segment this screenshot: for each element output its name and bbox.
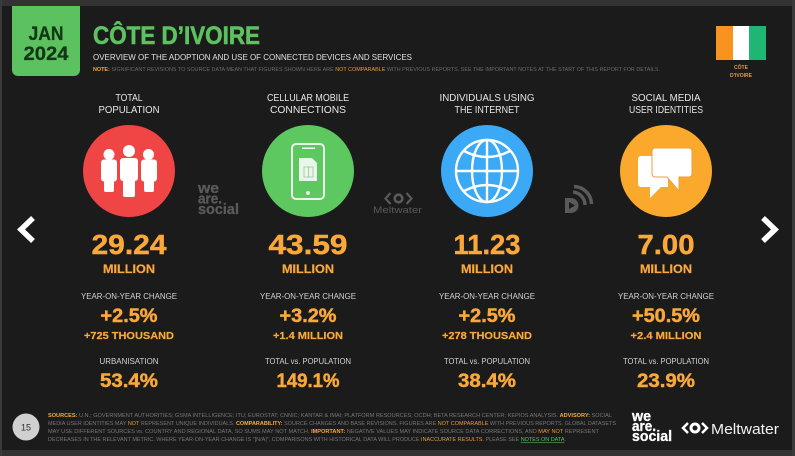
panel: individuals using the internet: YEAR-ON-YEAR CHANGE	[439, 292, 535, 301]
flag: Côte d'Ivoire: CÔTE	[734, 63, 749, 71]
footer notes: MAY USE DIFFERENT SOURCES vs. COUNTRY AND REGIONAL DATA, SO SUMS MAY NOT MATCH. IMPORTANT: NEGATIVE VALUES MAY INDICATE SOURCE DATA CORRECTIONS, AND MAY NOT REPRESENT	[48, 429, 600, 435]
panel: individuals using the internet: +278 THOUSAND	[442, 330, 532, 342]
panel: individuals using the internet: 11.23	[454, 229, 520, 260]
watermark: we are social: social	[198, 202, 239, 218]
footer notes: MEDIA USER IDENTITIES MAY NOT REPRESENT UNIQUE INDIVIDUALS. COMPARABILITY: SOURCE CHANGES AND BASE REVISIONS. FIGURES ARE NOT COMPARABLE WITH PREVIOUS REPORTS. GLOBAL DATASETS	[48, 421, 616, 427]
date badge: 2024	[24, 44, 69, 65]
logo: Meltwater	[683, 421, 779, 438]
panel: cellular mobile connections: +1.4 MILLION	[273, 330, 343, 342]
panel: individuals using the internet: MILLION	[461, 264, 513, 276]
panel: individuals using the internet: 38.4%	[458, 371, 516, 392]
title: CÔTE D’IVOIRE	[93, 20, 260, 50]
watermark: we are social: are.	[198, 192, 222, 208]
panel: individuals using the internet: THE INTERNET	[454, 104, 520, 116]
subtitle: OVERVIEW OF THE ADOPTION AND USE OF CONNECTED DEVICES AND SERVICES	[93, 52, 412, 62]
footer notes: SOURCES: U.N.; GOVERNMENT AUTHORITIES; GSMA INTELLIGENCE; ITU; EUROSTAT; CNNIC; KANTAR & IMAI; PLATFORM RESOURCES; OCDH; BETA RESEARCH CENTER; KEPIOS ANALYSIS. ADVISORY: SOCIAL	[48, 413, 612, 419]
panel: cellular mobile connections: YEAR-ON-YEAR CHANGE	[260, 292, 356, 301]
footer notes	[48, 413, 616, 443]
panel: cellular mobile connections: +3.2%	[280, 306, 337, 327]
logo: we are social	[631, 409, 672, 445]
icon: globe	[441, 125, 533, 217]
date badge	[12, 6, 80, 76]
panel: total population: 53.4%	[100, 371, 158, 392]
panel: total population: MILLION	[103, 264, 155, 276]
panel: cellular mobile connections: CONNECTIONS	[270, 104, 346, 116]
panel: individuals using the internet	[439, 92, 535, 392]
icon: mobile phone	[262, 125, 354, 217]
panel: cellular mobile connections: CELLULAR MOBILE	[267, 92, 349, 104]
panel: cellular mobile connections	[260, 92, 356, 392]
panel: social media user identities: 7.00	[638, 229, 694, 260]
icon: people	[83, 125, 175, 217]
page number: 15	[21, 422, 31, 432]
panel: social media user identities: MILLION	[640, 264, 692, 276]
panel: social media user identities	[618, 92, 714, 392]
panel: individuals using the internet: +2.5%	[458, 306, 516, 327]
logo: we are social: we	[631, 409, 651, 425]
panel: total population	[81, 92, 177, 392]
note: NOTE: SIGNIFICANT REVISIONS TO SOURCE DATA MEAN THAT FIGURES SHOWN HERE ARE NOT COMPARABLE WITH PREVIOUS REPORTS. SEE THE IMPORTANT NOTES AT THE START OF THIS REPORT FOR DETAILS.	[93, 67, 660, 73]
page number	[12, 414, 40, 440]
watermark: we are social: we	[197, 181, 219, 197]
panel: cellular mobile connections: 43.59	[268, 229, 348, 260]
arrow: next	[763, 218, 775, 241]
panel: cellular mobile connections: 149.1%	[276, 371, 340, 392]
panel: social media user identities: +50.5%	[632, 306, 700, 327]
date badge: JAN	[28, 24, 64, 45]
panel: total population: POPULATION	[98, 104, 160, 116]
watermark: Meltwater: Meltwater	[373, 205, 422, 216]
logo: Meltwater: Meltwater	[711, 421, 779, 438]
panel: total population: TOTAL	[116, 92, 143, 104]
panel: social media user identities: SOCIAL MEDIA	[632, 92, 700, 104]
watermark: signal icon	[565, 186, 592, 213]
panel: social media user identities: TOTAL vs. POPULATION	[623, 357, 709, 366]
icon: speech bubbles	[620, 125, 712, 217]
panel: social media user identities: +2.4 MILLION	[630, 330, 702, 342]
panel: social media user identities: USER IDENTITIES	[629, 104, 703, 116]
panel: total population: YEAR-ON-YEAR CHANGE	[81, 292, 177, 301]
panel: cellular mobile connections: TOTAL vs. POPULATION	[265, 357, 351, 366]
panel: social media user identities: 23.9%	[637, 371, 695, 392]
panel: total population: +725 THOUSAND	[84, 330, 174, 342]
watermark: Meltwater	[373, 193, 422, 216]
panel: total population: URBANISATION	[100, 357, 159, 366]
panel: cellular mobile connections: MILLION	[282, 264, 334, 276]
watermark: we are social	[197, 181, 239, 218]
logo: we are social: social	[632, 429, 672, 445]
panel: individuals using the internet: INDIVIDUALS USING	[440, 92, 534, 104]
footer notes: DECREASES IN THE RELEVANT METRIC. WHERE YEAR-ON-YEAR CHANGE IS "[N/A]", COMPARISONS WITH HISTORICAL DATA WILL PRODUCE INACCURATE RESULTS. PLEASE SEE NOTES ON DATA.	[48, 437, 566, 443]
flag: Côte d'Ivoire: D’IVOIRE	[730, 73, 753, 79]
logo: we are social: are.	[632, 419, 656, 435]
panel: individuals using the internet: TOTAL vs. POPULATION	[444, 357, 530, 366]
arrow: previous	[21, 218, 33, 241]
panel: total population: +2.5%	[100, 306, 158, 327]
flag: Côte d'Ivoire	[716, 26, 766, 79]
panel: total population: 29.24	[92, 229, 167, 260]
panel: social media user identities: YEAR-ON-YEAR CHANGE	[618, 292, 714, 301]
